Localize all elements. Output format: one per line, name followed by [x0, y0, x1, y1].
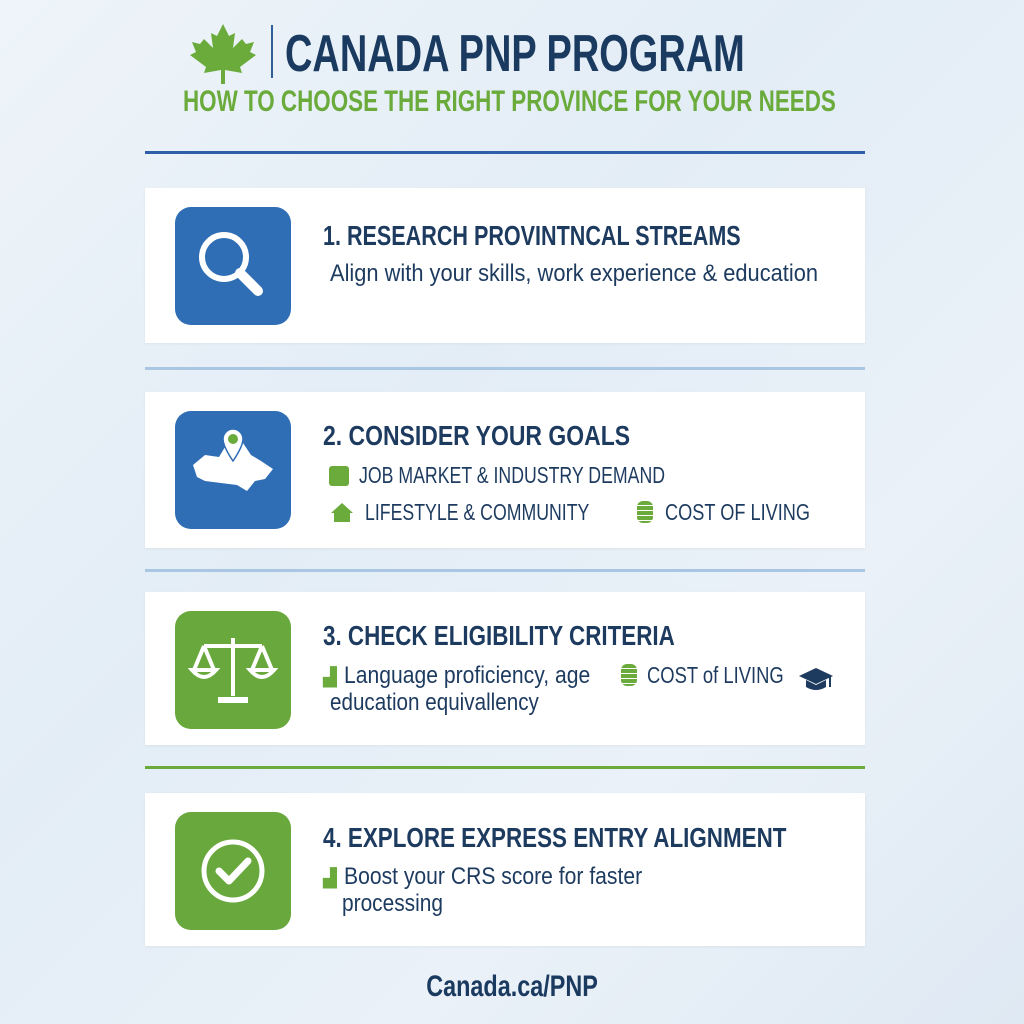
icon: canada map pin	[175, 411, 291, 529]
text 3: Language proficiency, age	[344, 662, 590, 689]
panel: step 4	[145, 793, 865, 946]
heading 4: 4. EXPLORE EXPRESS ENTRY ALIGNMENT	[323, 822, 786, 853]
panel: step 2	[145, 392, 865, 548]
icon: maple leaf	[190, 24, 256, 84]
text 3: ▟	[323, 667, 337, 687]
divider line by logo	[271, 25, 273, 78]
icon: scales	[175, 611, 291, 729]
icon: check	[175, 812, 291, 930]
text 1: Align with your skills, work experience & education	[330, 260, 818, 287]
panel: step 1	[145, 188, 865, 343]
item: cost of living: COST OF LIVING	[665, 499, 810, 525]
icon: magnifier	[175, 207, 291, 325]
panel: step 3: COST of LIVING	[647, 662, 784, 688]
text 4: Boost your CRS score for faster	[344, 863, 642, 890]
panel: step 3	[145, 592, 865, 745]
footer url: Canada.ca/PNP	[426, 970, 598, 1003]
heading 3: 3. CHECK ELIGIBILITY CRITERIA	[323, 620, 675, 651]
icon: grad cap	[799, 668, 833, 690]
heading 1: 1. RESEARCH PROVINTNCAL STREAMS	[323, 220, 741, 251]
title: CANADA PNP PROGRAM	[285, 25, 745, 83]
heading 2: 2. CONSIDER YOUR GOALS	[323, 420, 630, 451]
item: lifestyle: LIFESTYLE & COMMUNITY	[365, 499, 589, 525]
panel: step 3: education equivallency	[330, 689, 539, 716]
panel: step 4: processing	[342, 890, 443, 917]
subtitle: HOW TO CHOOSE THE RIGHT PROVINCE FOR YOUR NEEDS	[183, 85, 836, 118]
item: job market: JOB MARKET & INDUSTRY DEMAND	[359, 462, 665, 488]
text 4: ▟	[323, 868, 337, 888]
